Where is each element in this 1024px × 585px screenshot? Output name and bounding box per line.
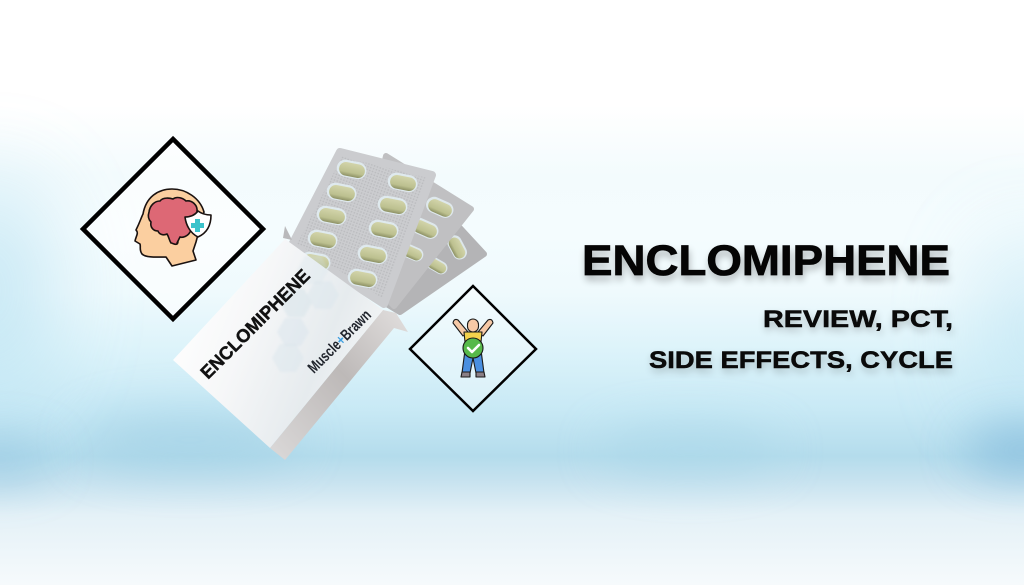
box side panel [270, 310, 408, 460]
shield [185, 211, 211, 237]
icon: head with brain and shield [135, 189, 211, 266]
blister pack: front [292, 152, 432, 304]
box front panel [173, 239, 383, 448]
cross [191, 219, 204, 232]
diamond: happy person icon [410, 286, 536, 411]
subtitle [649, 306, 953, 374]
box title: ENCLOMIPHENE [196, 265, 314, 383]
title shadow: ENCLOMIPHENE [583, 242, 951, 290]
subtitle: SIDE EFFECTS, CYCLE [649, 347, 953, 374]
box brand: Muscle+Brawn [305, 307, 375, 377]
subtitle: REVIEW, PCT, [763, 306, 953, 333]
medicine box [173, 226, 408, 460]
blister pack: back [380, 228, 484, 312]
hexagon pattern [272, 256, 339, 372]
box back flap [283, 226, 292, 240]
brain [148, 198, 198, 244]
blister pack: middle [360, 156, 471, 306]
diamond: brain icon [83, 139, 263, 319]
title: ENCLOMIPHENE [582, 237, 950, 285]
subtitle shadow [650, 310, 954, 378]
subtitle shadow: SIDE EFFECTS, CYCLE [650, 351, 954, 378]
subtitle shadow: REVIEW, PCT, [764, 310, 954, 337]
icon: person with check [453, 319, 493, 377]
